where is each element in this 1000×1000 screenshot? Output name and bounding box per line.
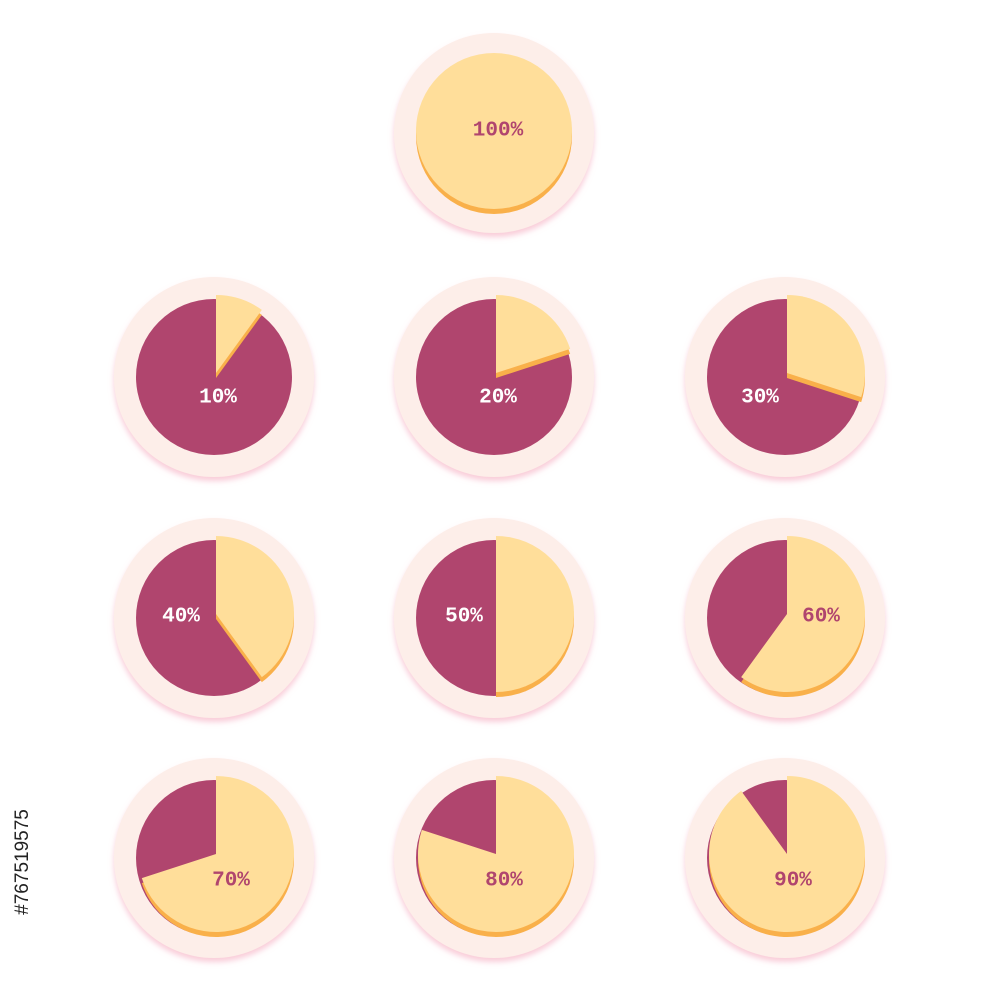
pie: 40%: 40% [162, 606, 200, 629]
pie: 20%: 20% [479, 387, 517, 410]
pie: 30% [685, 277, 885, 477]
pie: 80% [394, 758, 594, 958]
pie: 100% [394, 33, 594, 233]
pie: 40% [114, 518, 314, 718]
watermark id: #767519575 [12, 809, 33, 915]
pie: 50% [394, 518, 594, 718]
pie: 20% [394, 277, 594, 477]
pie: 80%: 80% [485, 870, 523, 893]
pie: 90% [685, 758, 885, 958]
pie: 10%: 10% [199, 387, 237, 410]
pie: 70% [114, 758, 314, 958]
pie: 100%: 100% [473, 120, 524, 143]
pie: 30%: 30% [741, 387, 779, 410]
pie: 70%: 70% [212, 870, 250, 893]
pie: 50%: 50% [445, 606, 483, 629]
pie: 90%: 90% [774, 870, 812, 893]
pie: 10% [114, 277, 314, 477]
pie: 60% [685, 518, 885, 718]
pie: 60%: 60% [802, 606, 840, 629]
